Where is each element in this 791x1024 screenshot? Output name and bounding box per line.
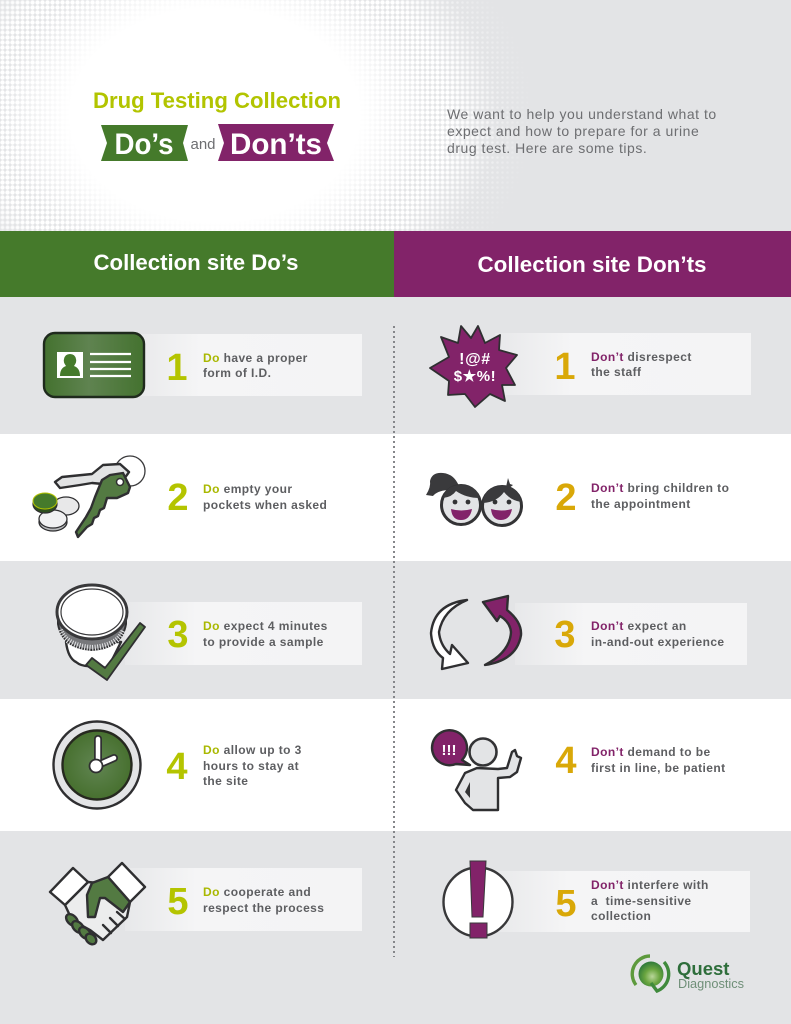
icon: circular arrows	[431, 596, 521, 669]
text: Don’t	[591, 619, 624, 633]
number 1: 1	[166, 347, 188, 389]
number 5: 5	[555, 883, 577, 925]
text: demand to be	[624, 745, 711, 759]
icon: swearing burst	[430, 326, 517, 407]
number 2: 2	[167, 477, 189, 519]
number 3: 3	[167, 614, 189, 656]
do 5	[50, 863, 362, 946]
text: the site	[203, 774, 248, 788]
text: first in line, be patient	[591, 761, 726, 775]
text: interfere with	[624, 878, 709, 892]
do 2	[33, 456, 327, 537]
icon: sample cup with check	[57, 585, 145, 680]
word: and: and	[190, 136, 216, 153]
number 2: 2	[555, 477, 577, 519]
icon: handshake	[50, 863, 145, 946]
text: respect the process	[203, 901, 324, 915]
column heading: Collection site Don'ts: Collection site Don’ts	[478, 252, 706, 277]
strip	[490, 871, 750, 932]
text: have a proper	[220, 351, 308, 365]
text: in-and-out experience	[591, 635, 725, 649]
banner: Do's: Do’s	[114, 128, 174, 161]
number 3: 3	[554, 614, 576, 656]
don't 4	[432, 730, 726, 810]
text: form of I.D.	[203, 366, 271, 380]
header background	[0, 0, 791, 231]
number 1: 1	[554, 346, 576, 388]
text: Don’t	[591, 350, 624, 364]
icon: exclamation mark	[444, 861, 512, 938]
banner: Do's	[101, 125, 188, 161]
icon: clock	[54, 722, 140, 808]
column heading: Collection site Don'ts	[394, 231, 791, 297]
icon: person raising hand with speech bubble	[432, 730, 521, 810]
text: Don’t	[591, 481, 624, 495]
logo: Quest Diagnostics	[632, 956, 744, 991]
column heading: Collection site Do's	[0, 231, 394, 297]
column heading: Collection site Do's: Collection site Do’s	[94, 250, 298, 275]
do 1	[44, 333, 362, 397]
do 3	[57, 585, 362, 680]
text: hours to stay at	[203, 759, 299, 773]
don't 3	[431, 596, 747, 669]
text: expect 4 minutes	[220, 619, 328, 633]
text: Do	[203, 351, 220, 365]
icon: person raising hand with speech bubble: !!!	[442, 742, 456, 759]
intro text	[447, 106, 717, 156]
strip	[125, 602, 362, 665]
icon: ID card	[44, 333, 144, 397]
number 5: 5	[167, 881, 189, 923]
text: a time-sensitive	[591, 894, 692, 908]
banner: Don'ts: Don’ts	[230, 128, 322, 161]
row bands	[0, 297, 791, 1024]
don't 1	[430, 326, 751, 407]
text: Do	[203, 743, 220, 757]
logo: Quest Diagnostics: Diagnostics	[678, 977, 744, 991]
column divider	[393, 326, 395, 957]
text: Do	[203, 619, 220, 633]
icon: swearing burst: !@#	[459, 351, 491, 368]
title block	[93, 88, 341, 161]
text: the appointment	[591, 497, 691, 511]
strip	[130, 334, 362, 396]
icon: keys and coins	[33, 456, 145, 537]
icon: children	[426, 473, 522, 526]
text: empty your	[220, 482, 292, 496]
text: Don’t	[591, 878, 624, 892]
text: Do	[203, 482, 220, 496]
text: allow up to 3	[220, 743, 302, 757]
text: expect an	[624, 619, 687, 633]
text: the staff	[591, 365, 642, 379]
text: bring children to	[624, 481, 729, 495]
strip	[495, 333, 751, 395]
text: to provide a sample	[203, 635, 324, 649]
don't 2	[426, 473, 729, 526]
strip	[515, 603, 747, 665]
intro text: expect and how to prepare for a urine	[447, 123, 699, 139]
text: Do	[203, 885, 220, 899]
text: pockets when asked	[203, 498, 327, 512]
strip	[125, 868, 362, 931]
number 4: 4	[555, 740, 577, 782]
don't 5	[444, 861, 750, 938]
intro text: drug test. Here are some tips.	[447, 140, 647, 156]
text: cooperate and	[220, 885, 311, 899]
do 4	[54, 722, 302, 808]
icon: swearing burst: $★%!	[454, 368, 496, 385]
text: collection	[591, 909, 651, 923]
title: Drug Testing Collection: Drug Testing Collection	[93, 88, 341, 113]
number 4: 4	[166, 746, 188, 788]
logo: Quest Diagnostics: Quest	[677, 958, 729, 979]
text: disrespect	[624, 350, 692, 364]
intro text: We want to help you understand what to	[447, 106, 717, 122]
text: Don’t	[591, 745, 624, 759]
